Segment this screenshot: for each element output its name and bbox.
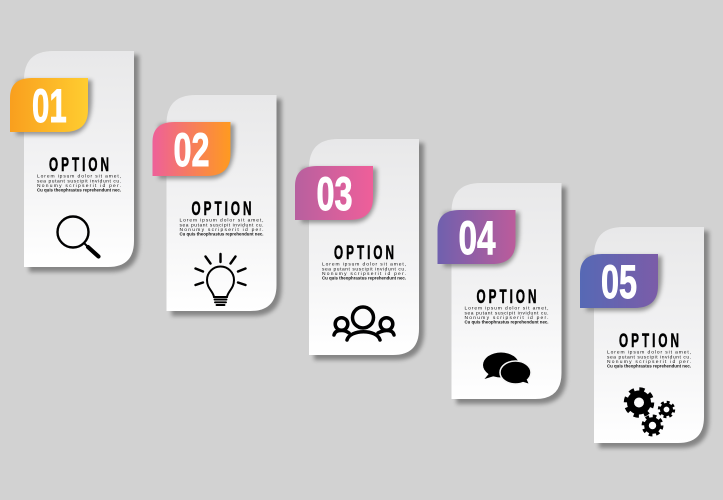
icon: light bulb bbox=[196, 254, 246, 305]
card 05 shadow bbox=[599, 231, 709, 448]
card 02 shadow bbox=[172, 99, 282, 316]
text 01 bbox=[37, 174, 121, 193]
icon: chat bubbles bbox=[483, 352, 531, 384]
tab 01 shadow bbox=[16, 80, 92, 135]
panel: option 02 bbox=[152, 95, 282, 316]
tab 04 bbox=[438, 210, 516, 264]
heading 03: OPTION bbox=[334, 242, 394, 264]
text 01: sea putant suscipit invidunt cu. bbox=[37, 178, 121, 184]
tab 01 bbox=[10, 78, 88, 132]
text 05: Nonumy scripserit id per. bbox=[607, 359, 691, 365]
text 03: Cu quis theophrastus reprehendunt nec. bbox=[322, 276, 406, 281]
text 01: Lorem ipsum dolor sit amet, bbox=[37, 174, 121, 180]
number 05: 05 bbox=[601, 256, 637, 309]
icon: magnifier bbox=[58, 216, 98, 256]
number 03: 03 bbox=[316, 168, 353, 221]
text 05: sea putant suscipit invidunt cu. bbox=[607, 354, 691, 360]
tab 05 shadow bbox=[586, 256, 662, 311]
card 01 shadow bbox=[29, 55, 139, 272]
tab 03 shadow bbox=[301, 168, 377, 223]
icon: gears bbox=[626, 390, 674, 435]
text 03: Lorem ipsum dolor sit amet, bbox=[322, 262, 406, 268]
card 03 shadow bbox=[314, 143, 424, 360]
heading 04: OPTION bbox=[476, 286, 536, 308]
text 03 bbox=[322, 262, 406, 281]
tab 02 bbox=[152, 122, 230, 176]
number 01: 01 bbox=[32, 81, 67, 133]
card 04 shadow bbox=[456, 187, 566, 404]
text 02: sea putant suscipit invidunt cu. bbox=[180, 222, 264, 228]
card 04 bbox=[452, 183, 562, 399]
text 05: Lorem ipsum dolor sit amet, bbox=[607, 350, 691, 356]
panel: option 05 bbox=[580, 227, 709, 448]
heading 01: OPTION bbox=[49, 154, 109, 176]
tab 05 bbox=[580, 254, 658, 308]
text 04: Lorem ipsum dolor sit amet, bbox=[464, 306, 548, 312]
tab 04 shadow bbox=[444, 212, 520, 267]
text 03: sea putant suscipit invidunt cu. bbox=[322, 266, 406, 272]
text 02: Nonumy scripserit id per. bbox=[180, 227, 263, 233]
tab 02 shadow bbox=[158, 124, 234, 179]
panel: option 04 bbox=[438, 183, 566, 404]
text 02 bbox=[180, 218, 264, 237]
panel: option 01 bbox=[10, 51, 139, 272]
tab 03 bbox=[295, 166, 373, 220]
text 04: Nonumy scripserit id per. bbox=[464, 315, 548, 321]
text 02: Cu quis theophrastus reprehendunt nec. bbox=[180, 232, 264, 237]
heading 02: OPTION bbox=[192, 198, 251, 220]
number 04: 04 bbox=[458, 211, 496, 264]
text 03: Nonumy scripserit id per. bbox=[322, 271, 406, 277]
heading 05: OPTION bbox=[619, 330, 679, 352]
text 04: Cu quis theophrastus reprehendunt nec. bbox=[464, 320, 548, 325]
text 05: Cu quis theophrastus reprehendunt nec. bbox=[607, 364, 691, 369]
text 04: sea putant suscipit invidunt cu. bbox=[464, 310, 548, 316]
text 01: Nonumy scripserit id per. bbox=[37, 183, 121, 189]
text 01: Cu quis theophrastus reprehendunt nec. bbox=[37, 188, 121, 193]
text 04 bbox=[464, 306, 548, 325]
panel: option 03 bbox=[295, 139, 424, 360]
icon: people bbox=[334, 307, 394, 340]
number 02: 02 bbox=[174, 124, 210, 177]
text 05 bbox=[607, 350, 691, 369]
card 03 bbox=[309, 139, 419, 355]
text 02: Lorem ipsum dolor sit amet, bbox=[180, 218, 264, 224]
card 05 bbox=[594, 227, 704, 443]
card 02 bbox=[166, 95, 276, 311]
card 01 bbox=[24, 51, 134, 267]
